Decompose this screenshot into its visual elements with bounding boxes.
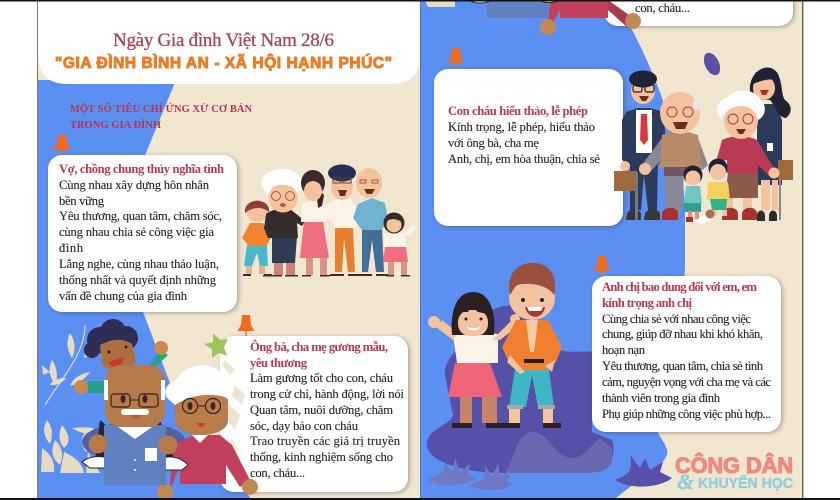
card body bbox=[448, 120, 600, 166]
card heading: Ông bà, cha mẹ gương mẫu, bbox=[250, 340, 388, 354]
card body: thống, kinh nghiệm sống cho bbox=[250, 450, 393, 464]
card body bbox=[250, 371, 404, 480]
logo: KHUYẾN HỌC bbox=[698, 475, 793, 492]
card body: sóc, dạy bảo con cháu bbox=[250, 419, 359, 433]
card body: Yêu thương, quan tâm, chia sẻ tình bbox=[602, 359, 764, 373]
card body: Anh, chị, em hòa thuận, chia sẻ bbox=[448, 152, 600, 166]
decorative oval bbox=[701, 50, 723, 78]
grandfather bbox=[88, 365, 178, 485]
card body: Trao truyền các giá trị truyền bbox=[250, 434, 401, 448]
panel: right page background bbox=[420, 0, 803, 500]
card body bbox=[602, 312, 771, 421]
card body bbox=[59, 178, 222, 303]
panel: card siblings bbox=[592, 276, 781, 432]
icon: pin 2 bbox=[238, 315, 254, 336]
card heading: yêu thương bbox=[250, 356, 308, 370]
card heading: Vợ, chồng chung thủy nghĩa tình bbox=[59, 162, 224, 176]
repeated illustration bottom bbox=[425, 0, 641, 35]
logo: CÔNG DÂN bbox=[675, 453, 793, 478]
girl bbox=[383, 212, 416, 276]
card body: với ông bà, cha mẹ bbox=[448, 136, 539, 150]
icon: pin 4 bbox=[594, 256, 610, 277]
grandfather bbox=[353, 168, 390, 276]
card body: trong cử chỉ, hành động, lời nói bbox=[250, 387, 404, 401]
grandmother bbox=[157, 365, 258, 500]
son bbox=[614, 70, 666, 220]
illustration: three generation family bbox=[614, 68, 793, 224]
card body: Yêu thương, quan tâm, chăm sóc, bbox=[59, 209, 222, 223]
boy bbox=[502, 263, 562, 428]
card body: bền vững bbox=[59, 194, 105, 208]
illustration: grandparents with grandchild bbox=[74, 319, 258, 500]
mother bbox=[750, 68, 793, 221]
girl bbox=[428, 292, 520, 428]
little girl bbox=[684, 166, 702, 222]
plants: lower left bbox=[428, 458, 512, 490]
card body: hoạn nạn bbox=[602, 343, 646, 357]
card body: chung, giúp đỡ nhau khi khó khăn, bbox=[602, 327, 763, 341]
boy bbox=[242, 200, 272, 276]
grandmother bbox=[261, 169, 305, 276]
panel: card grandparents bbox=[220, 336, 408, 492]
card body: Cùng chia sẻ với nhau công việc bbox=[602, 312, 751, 326]
purple backdrop bbox=[82, 422, 186, 462]
icon: pin 1 bbox=[53, 135, 71, 155]
panel: left page background bbox=[37, 0, 420, 500]
card body: Phụ giúp những công việc phù hợp... bbox=[602, 407, 771, 421]
card body: cảm, nguyện vọng với cha mẹ và các bbox=[602, 375, 771, 389]
little boy bbox=[707, 158, 730, 216]
mother bbox=[300, 170, 333, 276]
plant: lower right bbox=[615, 455, 672, 487]
card body: đình bbox=[59, 241, 84, 255]
card heading: Con cháu hiếu thảo, lễ phép bbox=[448, 104, 588, 118]
card body: vấn đề chung của gia đình bbox=[59, 289, 188, 303]
card body: thành viên trong gia đình bbox=[602, 391, 721, 405]
card body: Lắng nghe, cùng nhau thảo luận, bbox=[59, 257, 219, 271]
star toy bbox=[204, 333, 228, 358]
logo: & bbox=[677, 469, 694, 494]
panel: card spouses bbox=[48, 155, 237, 312]
card body: cùng nhau chia sẻ công việc gia bbox=[59, 225, 214, 239]
illustration: family of six bbox=[242, 164, 416, 276]
card body: Quan tâm, nuôi dưỡng, chăm bbox=[250, 403, 393, 417]
card heading bbox=[250, 340, 388, 370]
card heading: kính trọng anh chị bbox=[602, 296, 692, 310]
section heading: TRONG GIA ĐÌNH bbox=[70, 119, 161, 131]
logo bbox=[675, 453, 793, 494]
panel: card grandchildren bbox=[434, 69, 623, 226]
header banner bbox=[38, 0, 420, 84]
card body: Làm gương tốt cho con, cháu bbox=[250, 371, 394, 385]
purple hill backdrop bbox=[427, 306, 614, 473]
child on shoulders bbox=[74, 319, 188, 470]
title: Ngày Gia đình Việt Nam 28/6 bbox=[113, 30, 334, 51]
illustration: leaves bbox=[41, 325, 245, 473]
section heading: MỘT SỐ TIÊU CHÍ ỨNG XỬ CƠ BẢN bbox=[70, 102, 252, 115]
section heading bbox=[70, 102, 252, 131]
card body: thống nhất và quyết định những bbox=[59, 273, 217, 287]
card body: Kính trọng, lễ phép, hiếu thảo bbox=[448, 120, 595, 134]
grandmother bbox=[716, 90, 780, 220]
card heading bbox=[602, 280, 758, 310]
icon: pin 3 bbox=[448, 48, 464, 69]
slogan: "GIA ĐÌNH BÌNH AN - XÃ HỘI HẠNH PHÚC" bbox=[55, 54, 392, 72]
illustration: siblings bbox=[428, 263, 562, 428]
card body: con, cháu... bbox=[250, 466, 305, 480]
panel: page continuation at top of right column bbox=[425, 0, 793, 35]
card heading: Anh chị bao dung đối với em, em bbox=[602, 280, 758, 294]
card body: Cùng nhau xây dựng hôn nhân bbox=[59, 178, 210, 192]
repeated body text: con, cháu... bbox=[635, 1, 690, 15]
dog bbox=[694, 210, 714, 224]
father bbox=[322, 164, 358, 276]
grandfather bbox=[639, 92, 708, 220]
